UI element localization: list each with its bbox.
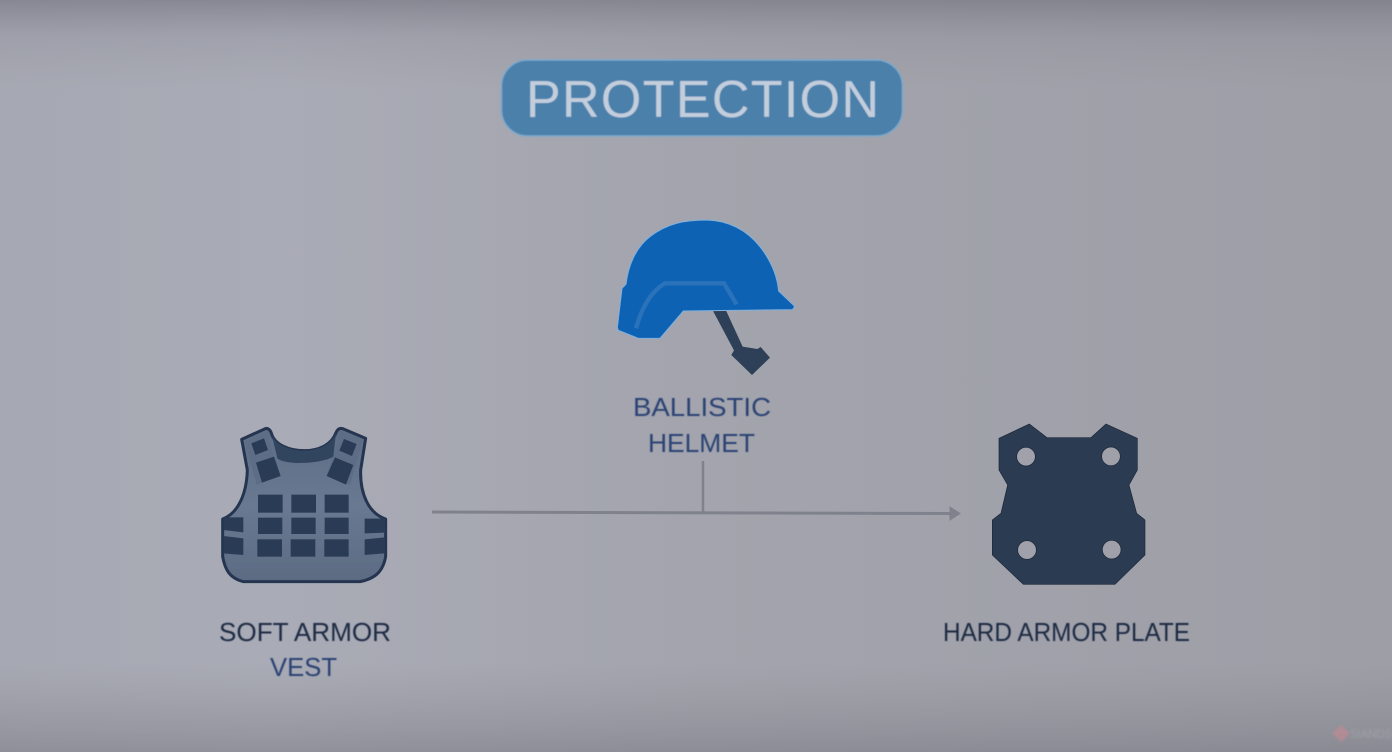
vest collar shading	[272, 433, 336, 463]
vest side panels	[223, 517, 385, 555]
title text: PROTECTION	[526, 71, 879, 129]
helmet rim detail	[636, 283, 737, 328]
label: soft armor vest: SOFT ARMOR	[219, 617, 391, 647]
icon: soft armor vest	[223, 428, 386, 582]
label: hard armor plate: HARD ARMOR PLATE	[943, 617, 1190, 647]
vest body	[223, 428, 386, 582]
vest shoulder pouches	[251, 438, 357, 485]
helmet strap and buckle	[712, 309, 770, 375]
label: ballistic helmet: HELMET	[648, 428, 755, 458]
title badge	[502, 60, 902, 136]
label: ballistic helmet: BALLISTIC	[633, 392, 771, 422]
icon: hard armor plate	[992, 424, 1145, 584]
label: soft armor vest	[219, 617, 391, 682]
icon: ballistic helmet	[617, 220, 795, 375]
vest shoulder straps	[245, 433, 362, 485]
connector arrow	[432, 461, 960, 520]
vest front pouches	[257, 495, 349, 557]
label: soft armor vest: VEST	[270, 652, 337, 682]
label: ballistic helmet	[633, 392, 771, 458]
helmet shell	[617, 220, 795, 338]
watermark	[1332, 725, 1392, 742]
